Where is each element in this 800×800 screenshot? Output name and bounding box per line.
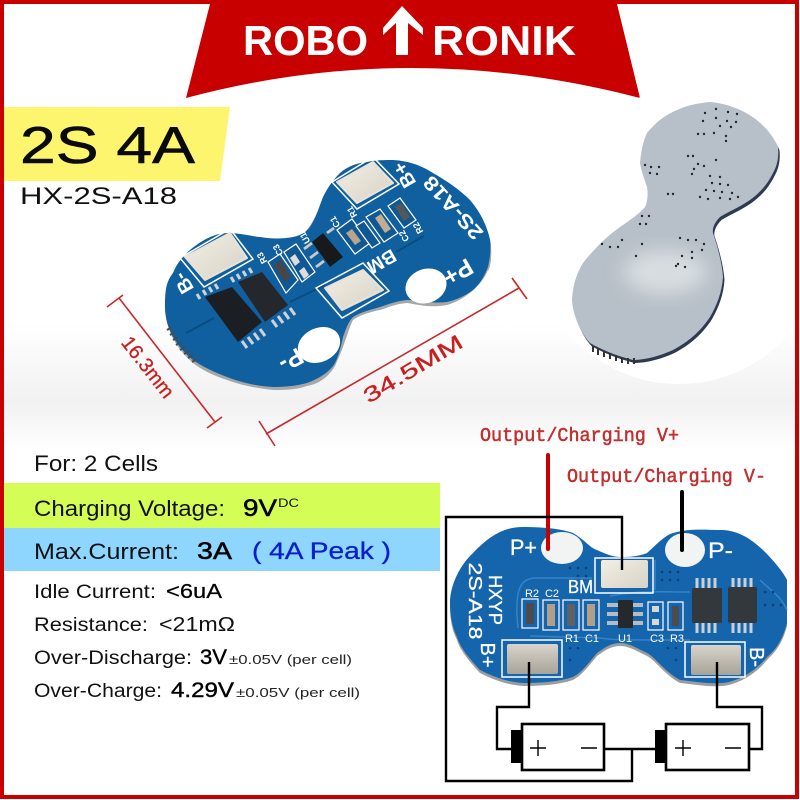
spec band: max current bbox=[4, 528, 440, 571]
board labels: 2S-A18 bbox=[419, 171, 488, 244]
board labels: C1 bbox=[585, 633, 599, 645]
chip: U1 bbox=[304, 228, 343, 267]
spec: resistance: Resistance: bbox=[34, 615, 148, 636]
spec: over-discharge: Over-Discharge: bbox=[34, 648, 192, 669]
unit: DC bbox=[278, 496, 299, 510]
dimension: length 34.5MM bbox=[259, 278, 527, 446]
solder pad: B- bbox=[180, 229, 253, 287]
main photo: board front bbox=[165, 157, 491, 390]
board labels: R1 bbox=[345, 205, 359, 219]
copper trace outline bbox=[517, 560, 787, 640]
board labels: B+ bbox=[389, 158, 421, 191]
board labels: C1 bbox=[328, 215, 342, 229]
edge pins bbox=[167, 327, 197, 362]
spec: idle current: <6uA bbox=[166, 581, 223, 603]
value: 9V bbox=[243, 495, 277, 522]
spec band: charging voltage bbox=[4, 483, 440, 528]
chip: MOSFET 2 bbox=[238, 272, 288, 322]
model number: HX-2S-A18 bbox=[20, 183, 177, 210]
board labels: C2 bbox=[397, 229, 411, 243]
board labels: 2S-A18 bbox=[465, 562, 485, 640]
spec: idle current: Idle Current: bbox=[34, 582, 156, 603]
hole P+ bbox=[400, 263, 452, 309]
board labels: C3 bbox=[650, 633, 664, 645]
hole P- bbox=[292, 320, 346, 370]
spec: over-discharge bbox=[34, 646, 352, 669]
board labels: R3 bbox=[255, 251, 269, 265]
spec: cells: For: 2 Cells bbox=[34, 451, 158, 476]
chip pins bbox=[197, 268, 295, 348]
board labels: P- bbox=[708, 538, 733, 563]
chip: MOSFET 1 bbox=[205, 287, 262, 342]
back board edge pins bbox=[593, 346, 634, 364]
chip: MOSFETs bbox=[692, 578, 757, 633]
wiring label: V-: Output/Charging V- bbox=[567, 466, 766, 488]
board labels: U1 bbox=[618, 633, 632, 645]
pad B- bbox=[685, 642, 745, 677]
board labels: BM bbox=[363, 244, 399, 277]
board labels: B- bbox=[745, 647, 767, 667]
board labels bbox=[169, 158, 488, 377]
hole P+ bbox=[541, 532, 583, 564]
wiring label: V+: Output/Charging V+ bbox=[480, 425, 679, 447]
solder pad: BM bbox=[316, 263, 389, 318]
value: 3A bbox=[197, 538, 232, 565]
board labels: R1 bbox=[565, 633, 579, 645]
length label: 34.5MM bbox=[359, 331, 467, 408]
via dots bbox=[569, 567, 782, 661]
black wire: V- bbox=[680, 492, 684, 550]
peak value: ( 4A Peak ) bbox=[252, 538, 391, 565]
banner bbox=[186, 4, 640, 98]
board labels: C3 bbox=[271, 243, 285, 257]
spec: over-charge bbox=[34, 679, 360, 702]
board labels: P+ bbox=[510, 535, 537, 560]
board labels bbox=[465, 535, 767, 668]
board labels: R2 bbox=[525, 588, 539, 600]
spec: resistance: <21mΩ bbox=[159, 614, 235, 636]
spec: over-discharge: ±0.05V (per cell) bbox=[229, 652, 352, 667]
width label: 16.3mm bbox=[116, 332, 178, 403]
board labels: U1 bbox=[298, 231, 312, 245]
board labels: R2 bbox=[411, 221, 425, 235]
components bbox=[268, 198, 416, 293]
spec: over-charge: 4.29V bbox=[171, 679, 234, 702]
spec: resistance bbox=[34, 614, 235, 636]
board labels: C2 bbox=[545, 588, 559, 600]
icon: battery 2 bbox=[655, 724, 749, 770]
chip: U1 bbox=[607, 600, 643, 628]
logo text: ROBO: ROBO bbox=[243, 17, 368, 64]
board labels: P- bbox=[274, 342, 308, 377]
label: Max.Current: bbox=[34, 539, 179, 564]
hole P- bbox=[665, 533, 705, 567]
back board highlight bbox=[623, 250, 707, 294]
black wire: cell link bbox=[604, 748, 655, 750]
icon: battery 1 bbox=[511, 724, 604, 770]
dimension: width 16.3mm bbox=[107, 295, 222, 428]
board labels: BM bbox=[568, 577, 593, 597]
black wire: BM loop bbox=[446, 517, 632, 781]
board labels: P+ bbox=[438, 252, 478, 291]
board labels: B+ bbox=[476, 642, 498, 668]
model badge bbox=[4, 107, 230, 181]
SMD components bbox=[522, 599, 683, 630]
badge title: 2S 4A bbox=[20, 117, 195, 175]
spec: over-charge: ±0.05V (per cell) bbox=[236, 685, 360, 700]
board labels: R3 bbox=[670, 633, 684, 645]
wiring board photo bbox=[450, 527, 787, 686]
via dots bbox=[601, 108, 739, 268]
pad B+ bbox=[502, 640, 562, 677]
solder pad: B+ bbox=[332, 157, 399, 209]
spec: over-charge: Over-Charge: bbox=[34, 681, 162, 702]
label: Charging Voltage: bbox=[34, 496, 225, 521]
circle inset: board back bbox=[533, 92, 800, 384]
spec: over-discharge: 3V bbox=[200, 646, 227, 669]
back board dark edge bbox=[574, 105, 780, 363]
red wire: V+ bbox=[546, 455, 550, 549]
logo text: RONIK: RONIK bbox=[432, 17, 576, 64]
back board surface bbox=[572, 102, 778, 360]
logo arrow bbox=[383, 6, 423, 55]
pad BM bbox=[595, 558, 653, 593]
board labels: B- bbox=[169, 268, 199, 297]
black wire: B- to cell 2 bbox=[717, 662, 762, 749]
spec: idle current bbox=[34, 581, 223, 603]
black wire: B+ to cell 1 bbox=[497, 662, 529, 749]
board labels: HXYP bbox=[485, 575, 505, 625]
